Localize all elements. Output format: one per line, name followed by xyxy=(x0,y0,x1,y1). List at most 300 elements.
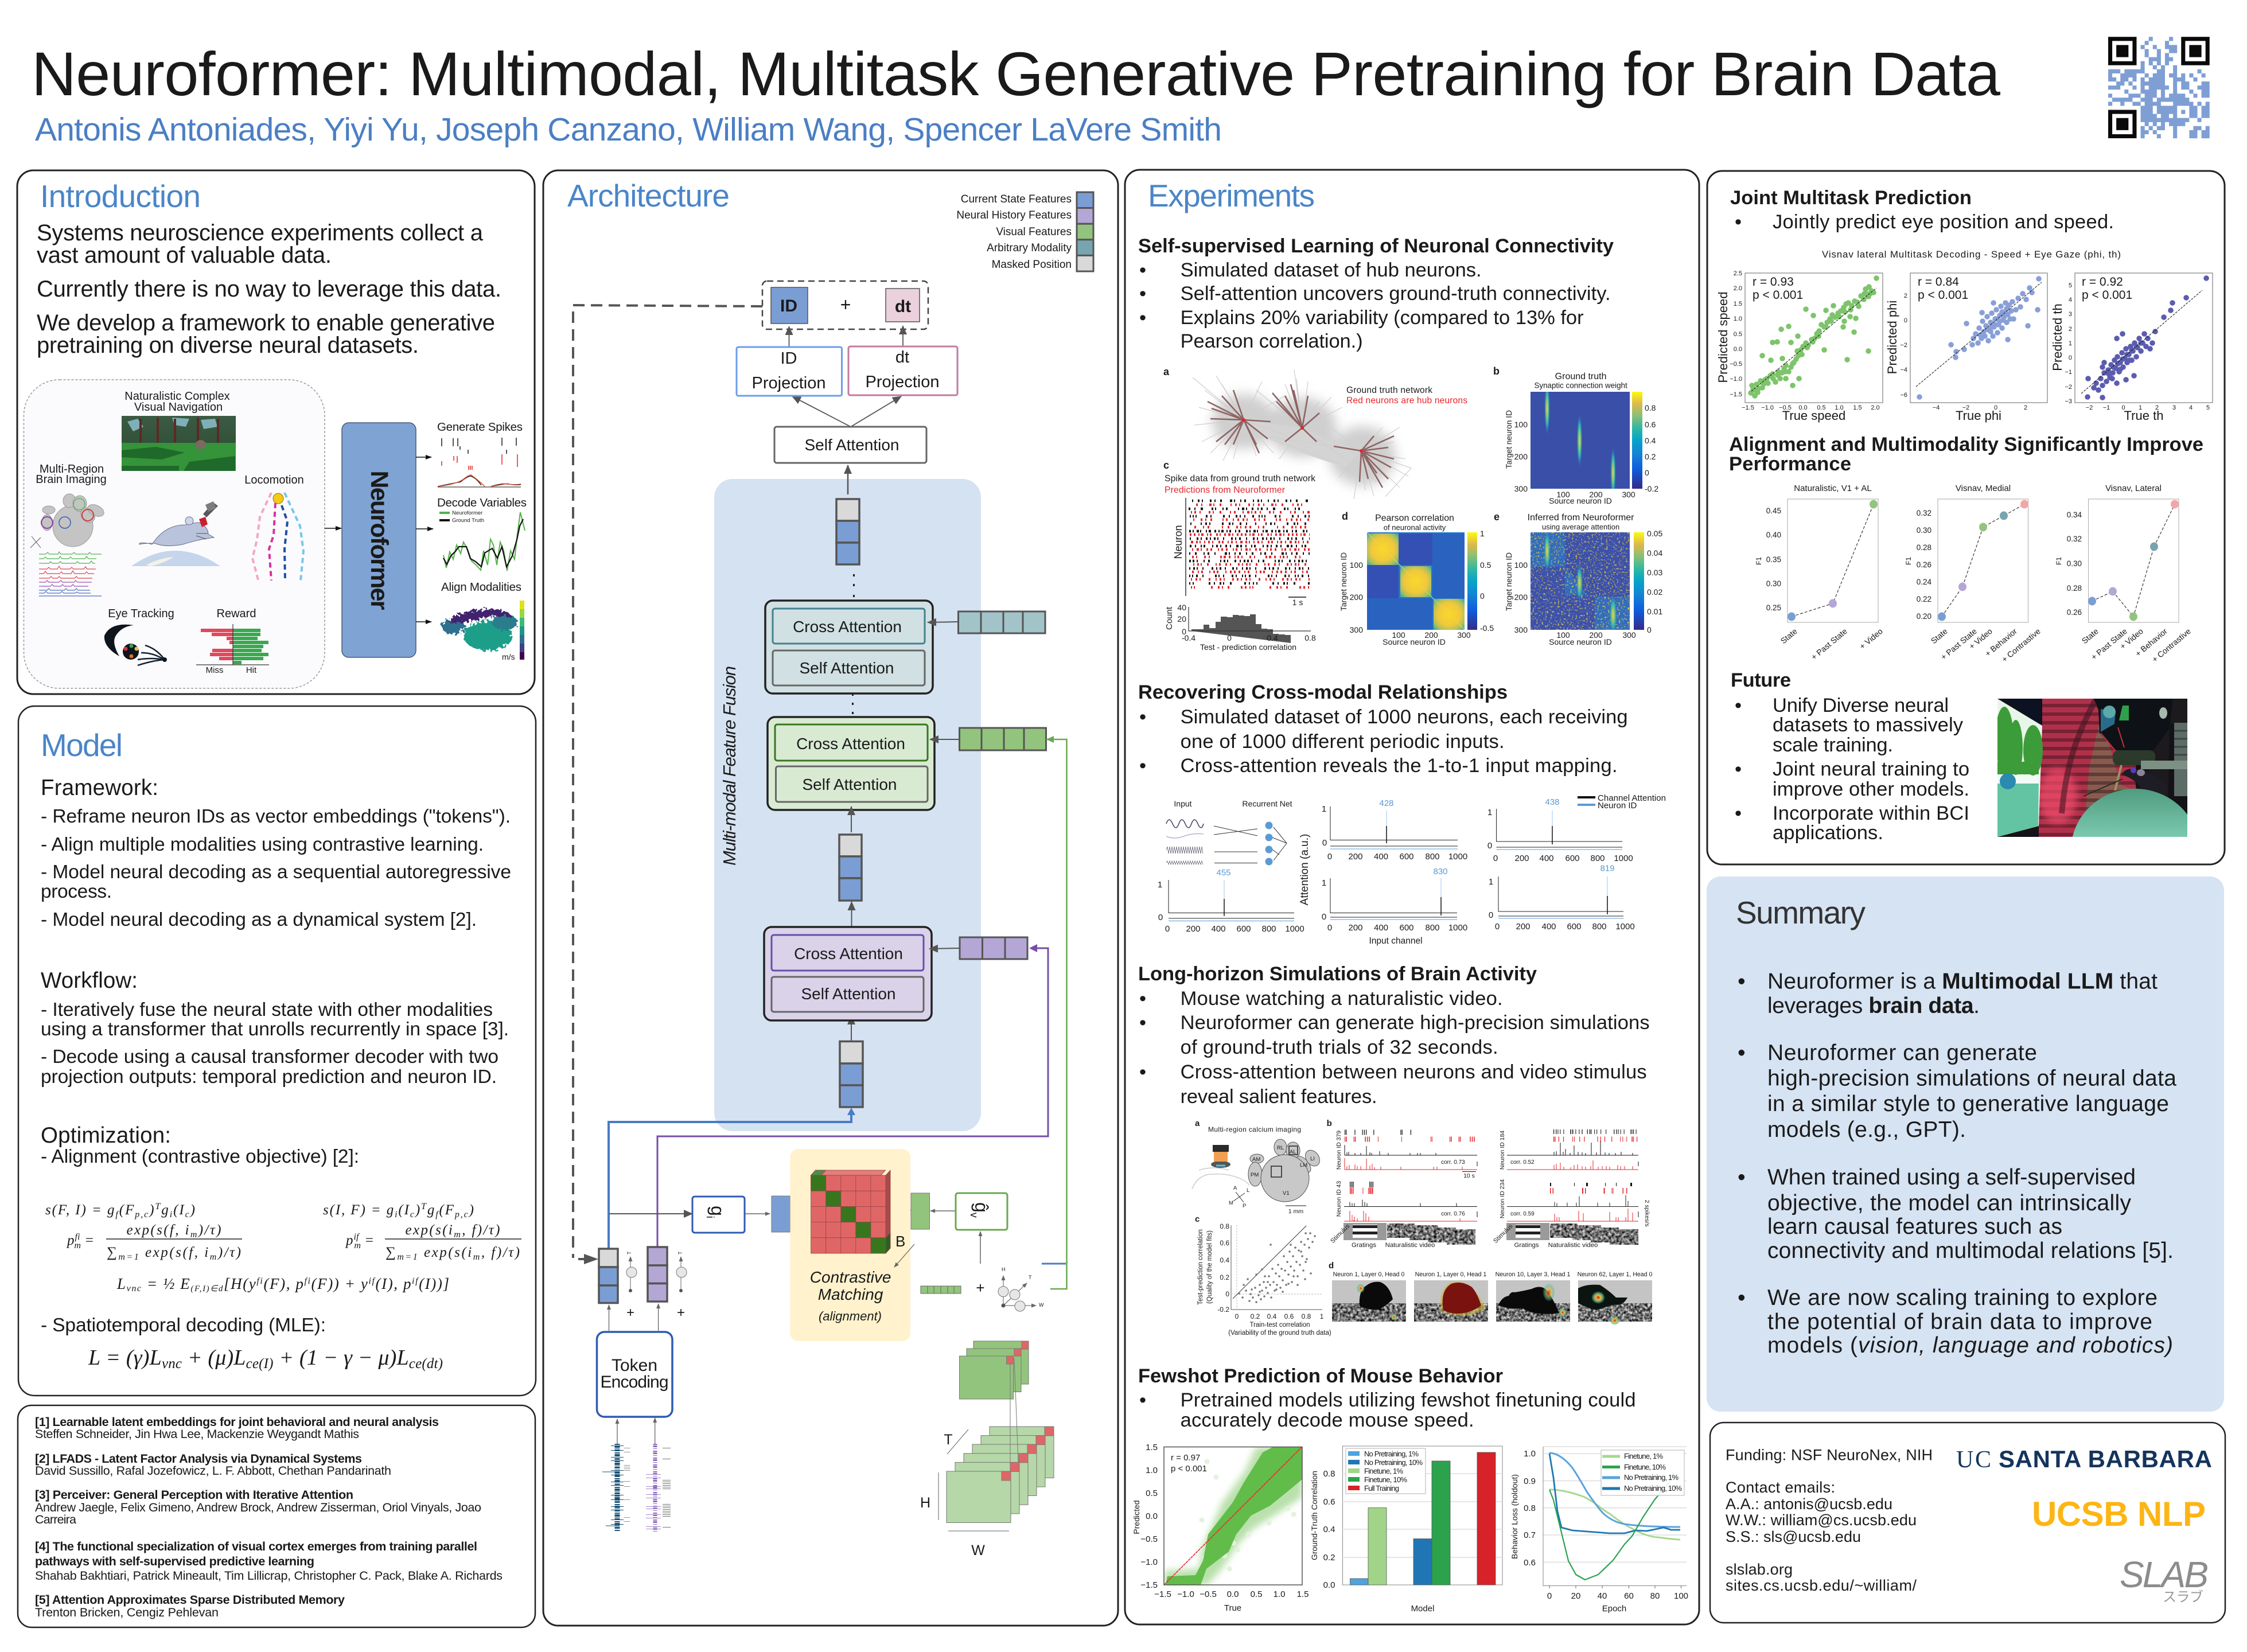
dimension labels: W xyxy=(971,1542,985,1559)
equations: contrastive objective: s(F, I) = g xyxy=(45,1202,114,1218)
text block: funding and contact: Contact emails: xyxy=(1726,1479,1835,1496)
section: connectivity: • xyxy=(1139,283,1146,305)
equations: contrastive objective: vnc xyxy=(127,1284,141,1293)
attention image 3 xyxy=(1496,1280,1570,1322)
equation: total loss: + (1 − γ − μ)L xyxy=(274,1346,409,1370)
box: token encoding xyxy=(597,1332,672,1417)
figure b: ground truth heatmap: 300 xyxy=(1622,490,1635,499)
chart: F1 medial: + Contrastive xyxy=(2000,626,2042,664)
section: future: • xyxy=(1735,758,1742,780)
chart: attention 438: 0 xyxy=(1493,854,1498,863)
figure a: calcium imaging setup: 1 mm xyxy=(1288,1208,1303,1215)
chart: reward histogram: Hit xyxy=(246,665,257,675)
box: g_i projection: g xyxy=(707,1206,728,1216)
chart: F1 lateral: Visnav, Lateral xyxy=(2105,484,2162,493)
label: naturalistic navigation xyxy=(124,390,230,414)
label: locomotion: Locomotion xyxy=(244,474,304,486)
chart: th scatter: −1 xyxy=(2103,404,2110,411)
section: fewshot xyxy=(1138,1365,1636,1431)
box: g_v projection: v xyxy=(968,1213,980,1218)
arrows: token encoding to stacks xyxy=(609,1304,659,1444)
chart: correlation histogram: -0.4 xyxy=(1182,633,1195,642)
figure b: ground truth heatmap: 0.8 xyxy=(1645,403,1656,412)
chart: F1 lateral: + Video xyxy=(2118,626,2145,651)
equations: contrastive objective: fi xyxy=(304,1276,310,1286)
text block: introduction: Currently there is no way to leverage this data. xyxy=(37,276,501,302)
chart: F1 medial: 0.30 xyxy=(1917,526,1931,535)
chart: th scatter: r = 0.92 xyxy=(2082,275,2123,289)
title: Neuroformer: Multimodal, Multitask Generative Pretraining for Brain Data xyxy=(32,39,2001,108)
figure d: Pearson heatmap: 100 xyxy=(1350,560,1363,570)
arrow: to g_i xyxy=(609,1213,692,1214)
chart: F1 naturalistic xyxy=(1755,484,1884,662)
chart: th scatter: −1 xyxy=(2065,369,2072,376)
section: connectivity: Pearson correlation.) xyxy=(1181,330,1363,352)
axis labels: attention xyxy=(1299,834,1423,946)
temporal embeddings: + xyxy=(626,1305,634,1320)
chart: F1 lateral: 0.28 xyxy=(2067,584,2082,593)
legend: Visual Features xyxy=(996,226,1072,238)
chart: phi scatter: −4 xyxy=(1900,367,1907,373)
chart: speed scatter: −1.0 xyxy=(1761,404,1774,411)
section: cross-modal: Simulated dataset of 1000 neurons, each receiving xyxy=(1181,706,1628,728)
figure c: spike raster: Spike data from ground truth network xyxy=(1165,474,1315,484)
legend: Full Training xyxy=(1364,1484,1399,1493)
summary bullets: in a similar style to generative language xyxy=(1767,1092,2169,1116)
dots xyxy=(852,574,854,714)
equations: contrastive objective xyxy=(45,1202,521,1293)
equations: contrastive objective: if xyxy=(368,1276,376,1286)
section: future: Incorporate within BCI xyxy=(1773,802,1969,824)
summary bullets: models (e.g., GPT). xyxy=(1767,1117,1966,1142)
section: connectivity: Self-attention uncovers ground-truth connectivity. xyxy=(1181,283,1611,305)
equations: contrastive objective: (F), p xyxy=(263,1275,303,1292)
text block: funding and contact: W.W.: william@cs.ucsb.edu xyxy=(1726,1511,1917,1529)
chart: th scatter: 1 xyxy=(2069,340,2072,347)
equation: total loss: vnc xyxy=(162,1356,182,1372)
section: long-horizon: • xyxy=(1139,1061,1146,1083)
text block: workflow: projection outputs: temporal prediction and neuron ID. xyxy=(41,1066,497,1088)
equation: total loss: ce(I) xyxy=(246,1356,274,1372)
figure b: ground truth heatmap: 200 xyxy=(1589,490,1603,499)
text block: workflow: Workflow: xyxy=(41,968,138,993)
label: brain imaging xyxy=(36,463,107,486)
chart: speed scatter: 2.0 xyxy=(1871,404,1880,411)
summary bullets: We are now scaling training to explore xyxy=(1767,1285,2158,1310)
block: visual attention: Cross Attention xyxy=(796,735,905,753)
chart: F1 lateral: + Contrastive xyxy=(2150,626,2193,664)
chart: predicted vs true speed: −0.5 xyxy=(1140,1534,1158,1544)
chart: attention 438: 0 xyxy=(1487,841,1492,851)
equations: contrastive objective: ) xyxy=(189,1202,195,1218)
section: cross-modal: one of 1000 different periodic inputs. xyxy=(1181,731,1505,753)
chart: th scatter: 0 xyxy=(2069,354,2072,361)
neuron 184: Neuron ID 184 xyxy=(1499,1131,1506,1170)
panel: contrastive matching: B xyxy=(895,1233,905,1250)
chart: attention 830: 0 xyxy=(1327,923,1332,933)
figure a: calcium imaging setup: AL xyxy=(1290,1149,1296,1155)
chart: F1 naturalistic: F1 xyxy=(1755,557,1763,565)
chart: F1 lateral: F1 xyxy=(2055,557,2063,565)
visual tokens with position embedding: T xyxy=(1029,1275,1032,1280)
panel: references: [1] Learnable latent embeddings for joint behavioral and neural analysis xyxy=(35,1415,439,1429)
figure d: Pearson heatmap: 1 xyxy=(1480,529,1485,538)
summary bullets: • xyxy=(1738,1041,1746,1065)
similarity matrix xyxy=(811,1170,890,1253)
chart: F1 naturalistic: + Past State xyxy=(1809,626,1849,662)
chart: predicted vs true speed: −1.0 xyxy=(1177,1589,1194,1599)
figure d: Pearson heatmap: d xyxy=(1342,511,1348,522)
equations: contrastive objective: ) xyxy=(148,1202,154,1218)
figure a: calcium imaging setup: PM xyxy=(1251,1172,1259,1178)
equations: contrastive objective: (F xyxy=(119,1202,134,1218)
equations: contrastive objective: f xyxy=(115,1210,119,1219)
figure e: inferred attention heatmap: Source neuron ID xyxy=(1549,637,1612,646)
text block: funding and contact: slslab.org xyxy=(1726,1561,1793,1578)
chart: correlation histogram: 0 xyxy=(1182,627,1186,636)
authors: Antonis Antoniades, Yiyi Yu, Joseph Canzano, William Wang, Spencer LaVere Smith xyxy=(35,111,1222,148)
chart: behavior loss: 60 xyxy=(1624,1591,1634,1601)
figure e: inferred attention heatmap: 300 xyxy=(1514,625,1528,634)
chart: phi scatter: −6 xyxy=(1900,392,1907,399)
chart: attention 455: 400 xyxy=(1211,924,1226,934)
panel: references: pathways with self-supervised predictive learning xyxy=(35,1554,314,1568)
output: align modalities xyxy=(441,580,524,661)
figure b: ground truth heatmap: 100 xyxy=(1556,490,1570,499)
chart: predicted vs true speed: 0.5 xyxy=(1251,1589,1262,1599)
chart: attention 455: 1000 xyxy=(1285,924,1304,934)
chart: F1 medial: 0.26 xyxy=(1917,560,1931,569)
diagram: input to recurrent net: Recurrent Net xyxy=(1242,799,1292,808)
box: token encoding: Token xyxy=(612,1356,657,1375)
figure b: ground truth heatmap xyxy=(1493,365,1658,505)
panel: references xyxy=(18,1405,535,1627)
panel: references: [3] Perceiver: General Perception with Iterative Attention xyxy=(35,1488,353,1502)
figure e: inferred attention heatmap xyxy=(1494,511,1662,646)
block: neural history attention: Self Attention xyxy=(801,985,896,1003)
figure a: calcium imaging setup: a xyxy=(1195,1119,1200,1128)
text block: workflow: - Decode using a causal transformer decoder with two xyxy=(41,1046,499,1067)
legend: No Pretraining, 1% xyxy=(1364,1450,1419,1458)
chart: attention 819: 800 xyxy=(1592,922,1607,932)
summary bullets: objective, the model can intrinsically xyxy=(1767,1191,2132,1215)
chart: attention 438: 400 xyxy=(1539,854,1554,863)
heading: Model: Model xyxy=(41,727,123,763)
blue panel: multi-modal feature fusion: Multi-modal Feature Fusion xyxy=(719,666,739,866)
equations: contrastive objective: exp(s(f, i xyxy=(126,1222,189,1238)
dashed feedback line xyxy=(573,305,762,1258)
icon: eye tracking xyxy=(104,625,167,665)
figure c: correlation scatter: Train-test correlation xyxy=(1249,1322,1310,1328)
chart: attention 819 xyxy=(1489,864,1635,932)
chart: correlation histogram: Count xyxy=(1165,606,1174,630)
equations: contrastive objective: ) xyxy=(468,1202,474,1218)
chart: attention 428: 428 xyxy=(1379,798,1394,808)
chart: th scatter: 5 xyxy=(2069,282,2072,289)
text block: framework: - Model neural decoding as a dynamical system [2]. xyxy=(41,909,477,930)
chart: predicted vs true speed: p < 0.001 xyxy=(1171,1464,1207,1474)
chart: F1 naturalistic: + Video xyxy=(1857,626,1884,651)
text block: introduction: We develop a framework to enable generative xyxy=(37,310,495,336)
neuron 234 xyxy=(1499,1179,1650,1226)
label: brain imaging: Brain Imaging xyxy=(36,473,107,486)
section heading: alignment xyxy=(1729,434,2203,475)
chart: speed scatter: 1.5 xyxy=(1853,404,1862,411)
equations: contrastive objective: (I), p xyxy=(376,1275,411,1292)
text block: framework: - Reframe neuron IDs as vector embeddings ("tokens"). xyxy=(41,806,511,827)
logo: UC Santa Barbara: SANTA BARBARA xyxy=(1999,1446,2212,1472)
temporal embeddings xyxy=(626,1251,687,1320)
legend: Finetune, 10% xyxy=(1624,1463,1666,1471)
figure b: ground truth heatmap: Target neuron ID xyxy=(1505,410,1513,469)
figure a: calcium imaging setup: A xyxy=(1233,1185,1237,1191)
summary bullets: high-precision simulations of neural data xyxy=(1767,1066,2176,1091)
section: future: Unify Diverse neural xyxy=(1773,695,1949,716)
equations: contrastive objective: exp(s(i xyxy=(405,1222,453,1238)
equations: contrastive objective: fi xyxy=(75,1232,80,1242)
figure d: attention maps: Neuron 62, Layer 1, Head 0 xyxy=(1578,1271,1652,1278)
chart: F1 medial: 0.32 xyxy=(1917,509,1931,517)
equations: contrastive objective: (I))] xyxy=(419,1275,449,1292)
arrow: feedback input xyxy=(578,1254,598,1264)
panel: references: [2] LFADS - Latent Factor Analysis via Dynamical Systems xyxy=(35,1452,362,1466)
figure b: ground truth heatmap: 0 xyxy=(1645,468,1649,477)
frames: video input xyxy=(947,1358,1054,1522)
chart: speed scatter: −0.5 xyxy=(1730,361,1742,368)
summary bullets: connectivity and multimodal relations [5]. xyxy=(1767,1238,2174,1263)
chart: predicted vs true speed: 1.5 xyxy=(1297,1589,1309,1599)
figure a: ground truth network xyxy=(1163,366,1467,499)
dimension labels: H xyxy=(920,1495,930,1511)
section: connectivity: Self-supervised Learning of Neuronal Connectivity xyxy=(1138,235,1614,257)
blue connector xyxy=(609,1108,855,1249)
neuron 43: Neuron ID 43 xyxy=(1335,1181,1342,1217)
text block: framework: Framework: xyxy=(41,776,158,800)
output: decode variables xyxy=(437,496,527,571)
box: ID projection: Projection xyxy=(752,374,825,392)
box: token encoding: Encoding xyxy=(600,1373,669,1392)
chart: speed scatter: 2.0 xyxy=(1734,285,1742,292)
chart: predicted vs true speed: r = 0.97 xyxy=(1171,1453,1200,1463)
label: eye tracking: Eye Tracking xyxy=(108,607,174,620)
figure a: calcium imaging setup xyxy=(1192,1119,1323,1215)
chart: speed scatter: −0.5 xyxy=(1779,404,1792,411)
chart: attention 455: 600 xyxy=(1236,924,1251,934)
equations: contrastive objective: c xyxy=(410,1210,414,1219)
section: long-horizon: reveal salient features. xyxy=(1181,1086,1377,1108)
panel: contrastive matching xyxy=(790,1149,914,1341)
chart: predicted vs true speed: 0.0 xyxy=(1227,1589,1239,1599)
text block: funding and contact: Funding: NSF NeuroNex, NIH xyxy=(1726,1447,1933,1464)
section heading: alignment: Performance xyxy=(1729,453,1851,475)
arrows: projection to matrix xyxy=(745,1210,980,1264)
chart: correlation histogram: 0.8 xyxy=(1304,633,1316,642)
label: brain imaging: Multi-Region xyxy=(40,463,104,476)
icon: visual cortex areas xyxy=(30,494,106,548)
temporal embeddings: T xyxy=(677,1251,683,1254)
figure c: correlation scatter: 0.6 xyxy=(1284,1312,1294,1320)
panel: references: Carreira xyxy=(35,1513,76,1526)
chart: correlation histogram xyxy=(1165,603,1316,652)
chart: th scatter: Predicted th xyxy=(2050,303,2065,371)
figure d: Pearson heatmap: -0.5 xyxy=(1480,624,1494,633)
figure b: ground truth heatmap: Synaptic connection weight xyxy=(1534,381,1627,390)
stimulus row left: Naturalistic video xyxy=(1385,1242,1435,1249)
caption: multitask decoding: Visnav lateral Multitask Decoding - Speed + Eye Gaze (phi, th) xyxy=(1822,249,2121,260)
section heading: alignment: Alignment and Multimodality Significantly Improve xyxy=(1729,434,2203,455)
summary bullets xyxy=(1738,969,2176,1358)
block: visual attention: Self Attention xyxy=(802,776,897,793)
block: arbitrary modality attention: Self Attention xyxy=(799,659,894,677)
chart: speed scatter: p < 0.001 xyxy=(1753,289,1803,302)
figure d: attention maps: d xyxy=(1329,1261,1334,1271)
equation: total loss: + (μ)L xyxy=(182,1346,246,1370)
figure c: correlation scatter: 0.4 xyxy=(1220,1256,1229,1264)
box: g_v projection xyxy=(956,1193,1007,1230)
box: ID projection xyxy=(737,347,842,396)
block: arbitrary modality attention: Cross Attention xyxy=(793,618,902,636)
chart: attention 819: 1000 xyxy=(1615,922,1635,932)
equations: contrastive objective: m xyxy=(190,1230,197,1240)
chart: speed scatter: −1.0 xyxy=(1730,376,1742,383)
legend xyxy=(1346,1448,1426,1494)
chart: attention 830: 1000 xyxy=(1448,923,1467,933)
figure a: calcium imaging setup: M xyxy=(1229,1200,1233,1206)
equations: contrastive objective: p,c xyxy=(134,1210,148,1219)
panel: contrastive matching: Matching xyxy=(818,1285,883,1303)
chart: ground-truth correlation bars: 0.4 xyxy=(1323,1525,1335,1534)
arrow: data to Neuroformer xyxy=(325,528,341,529)
equations: contrastive objective: fi xyxy=(256,1276,263,1286)
chart: neural signal blue xyxy=(602,1444,627,1532)
equations: contrastive objective: if xyxy=(412,1276,419,1286)
figure d: Pearson heatmap: 100 xyxy=(1392,630,1405,640)
chart: th scatter: p < 0.001 xyxy=(2082,289,2132,302)
text block: funding and contact: A.A.: antonis@ucsb.edu xyxy=(1726,1495,1892,1513)
block: Neuroformer: Neuroformer xyxy=(365,470,393,610)
legend: Finetune, 1% xyxy=(1364,1467,1403,1475)
chart: behavior loss xyxy=(1510,1447,1688,1614)
chart: phi scatter: −2 xyxy=(1962,404,1969,411)
chart: attention 830: 200 xyxy=(1348,923,1363,933)
figure c: correlation scatter: Test-prediction correlation xyxy=(1197,1229,1204,1305)
panel: references: Shahab Bakhtiari, Patrick Mineault, Tim Lillicrap, Christopher C. Pack, Blake A. Richards xyxy=(35,1569,503,1583)
attention image 4 xyxy=(1578,1280,1652,1325)
token stack: top xyxy=(836,499,859,564)
section: long-horizon: • xyxy=(1139,988,1146,1010)
chart: predicted vs true speed: Predicted xyxy=(1132,1500,1141,1534)
chart: attention 455: 200 xyxy=(1186,924,1201,934)
chart: th scatter: 4 xyxy=(2069,297,2072,303)
panel: references: Steffen Schneider, Jin Hwa Lee, Mackenzie Weygandt Mathis xyxy=(35,1427,359,1441)
chart: F1 medial: Visnav, Medial xyxy=(1956,484,2011,493)
chart: behavior loss: 80 xyxy=(1650,1591,1660,1601)
chart: th scatter: 0 xyxy=(2121,404,2125,411)
equations: contrastive objective: m=1 xyxy=(118,1252,139,1262)
chart: th scatter: 3 xyxy=(2069,311,2072,318)
text block: optimization: Optimization: xyxy=(41,1123,171,1148)
panel: references: [5] Attention Approximates Sparse Distributed Memory xyxy=(35,1593,345,1607)
chart: phi scatter: r = 0.84 xyxy=(1918,275,1959,289)
section: fewshot: Fewshot Prediction of Mouse Behavior xyxy=(1138,1365,1503,1387)
panel: contact and logos xyxy=(1710,1423,2225,1623)
chart: attention 830: 830 xyxy=(1433,867,1448,876)
chart: speed scatter: 2.5 xyxy=(1734,270,1742,277)
chart: attention 438: 800 xyxy=(1590,854,1605,863)
QR code xyxy=(2108,39,2210,137)
output: ID + dt xyxy=(762,281,928,329)
label: reward: Reward xyxy=(217,607,256,620)
section: future: Future xyxy=(1731,669,1791,691)
equations: contrastive objective: = ½ E xyxy=(142,1275,190,1292)
equations: contrastive objective: m xyxy=(210,1252,216,1262)
image: virtual forest xyxy=(122,416,236,471)
equations: contrastive objective: ∑ xyxy=(385,1245,396,1260)
text block: funding and contact: S.S.: sls@ucsb.edu xyxy=(1726,1528,1861,1545)
figure c: correlation scatter xyxy=(1195,1214,1331,1337)
chart: F1 lateral: 0.32 xyxy=(2067,535,2082,543)
figure d: Pearson heatmap: Pearson correlation xyxy=(1375,513,1454,523)
chart: F1 medial: 0.22 xyxy=(1917,595,1931,603)
block: neural history attention: Cross Attention xyxy=(794,945,903,963)
equations: contrastive objective: m=1 xyxy=(397,1252,418,1262)
panel: Architecture xyxy=(543,170,1118,1626)
section: future: Joint neural training to xyxy=(1773,758,1969,780)
chart: F1 lateral: 0.34 xyxy=(2067,511,2082,519)
inset: data modalities xyxy=(24,380,325,688)
diagram: input to recurrent net xyxy=(1166,799,1292,865)
temporal embeddings: T xyxy=(626,1251,632,1254)
neuron 379 xyxy=(1335,1131,1477,1179)
chart: predicted vs true speed: 0.5 xyxy=(1146,1489,1158,1498)
chart: F1 lateral: 0.30 xyxy=(2067,559,2082,568)
equations: contrastive objective: exp(s(i xyxy=(419,1245,472,1260)
equations: contrastive objective: (I xyxy=(173,1202,185,1218)
figure c: correlation scatter: 0 xyxy=(1225,1290,1229,1298)
section: cross-modal: Recovering Cross-modal Relationships xyxy=(1138,681,1508,703)
figure c: spike raster: Predictions from Neuroformer xyxy=(1165,485,1285,495)
section: future: • xyxy=(1735,802,1742,824)
section: fewshot: accurately decode mouse speed. xyxy=(1181,1409,1474,1431)
chart: attention 438: 200 xyxy=(1514,854,1529,863)
section: cross-modal xyxy=(1138,681,1628,777)
chart: ground-truth correlation bars: 0.2 xyxy=(1323,1553,1335,1563)
text block: framework: - Model neural decoding as a sequential autoregressive xyxy=(41,862,511,883)
section: cross-modal: • xyxy=(1139,755,1146,777)
equations: contrastive objective: )/τ) xyxy=(217,1245,241,1260)
output: align modalities: Align Modalities xyxy=(441,580,521,594)
section: connectivity xyxy=(1138,235,1614,352)
chart: F1 medial: + Past State xyxy=(1939,626,1979,662)
visual tokens with position embedding: W xyxy=(1039,1302,1044,1308)
text block: introduction: Systems neuroscience experiments collect a xyxy=(37,220,484,246)
chart: F1 naturalistic: 0.35 xyxy=(1766,555,1781,564)
panel: Joint multitask and future xyxy=(1707,171,2225,913)
chart: F1 naturalistic: 0.40 xyxy=(1766,531,1781,539)
blue panel: multi-modal feature fusion xyxy=(714,479,981,1131)
chart: speed scatter xyxy=(1716,270,1883,423)
chart: F1 lateral: State xyxy=(2080,626,2100,645)
figure a: ground truth network: a xyxy=(1163,366,1170,377)
summary bullets: learn causal features such as xyxy=(1767,1214,2062,1239)
chart: phi scatter: True phi xyxy=(1956,408,2001,423)
equations: contrastive objective: if xyxy=(353,1232,360,1242)
box: g_v projection: ĝ xyxy=(971,1202,992,1213)
section: connectivity: • xyxy=(1139,307,1146,329)
stimulus row right: Gratings xyxy=(1514,1242,1539,1249)
chart: F1 medial: State xyxy=(1929,626,1949,645)
panel: Summary xyxy=(1707,876,2224,1412)
